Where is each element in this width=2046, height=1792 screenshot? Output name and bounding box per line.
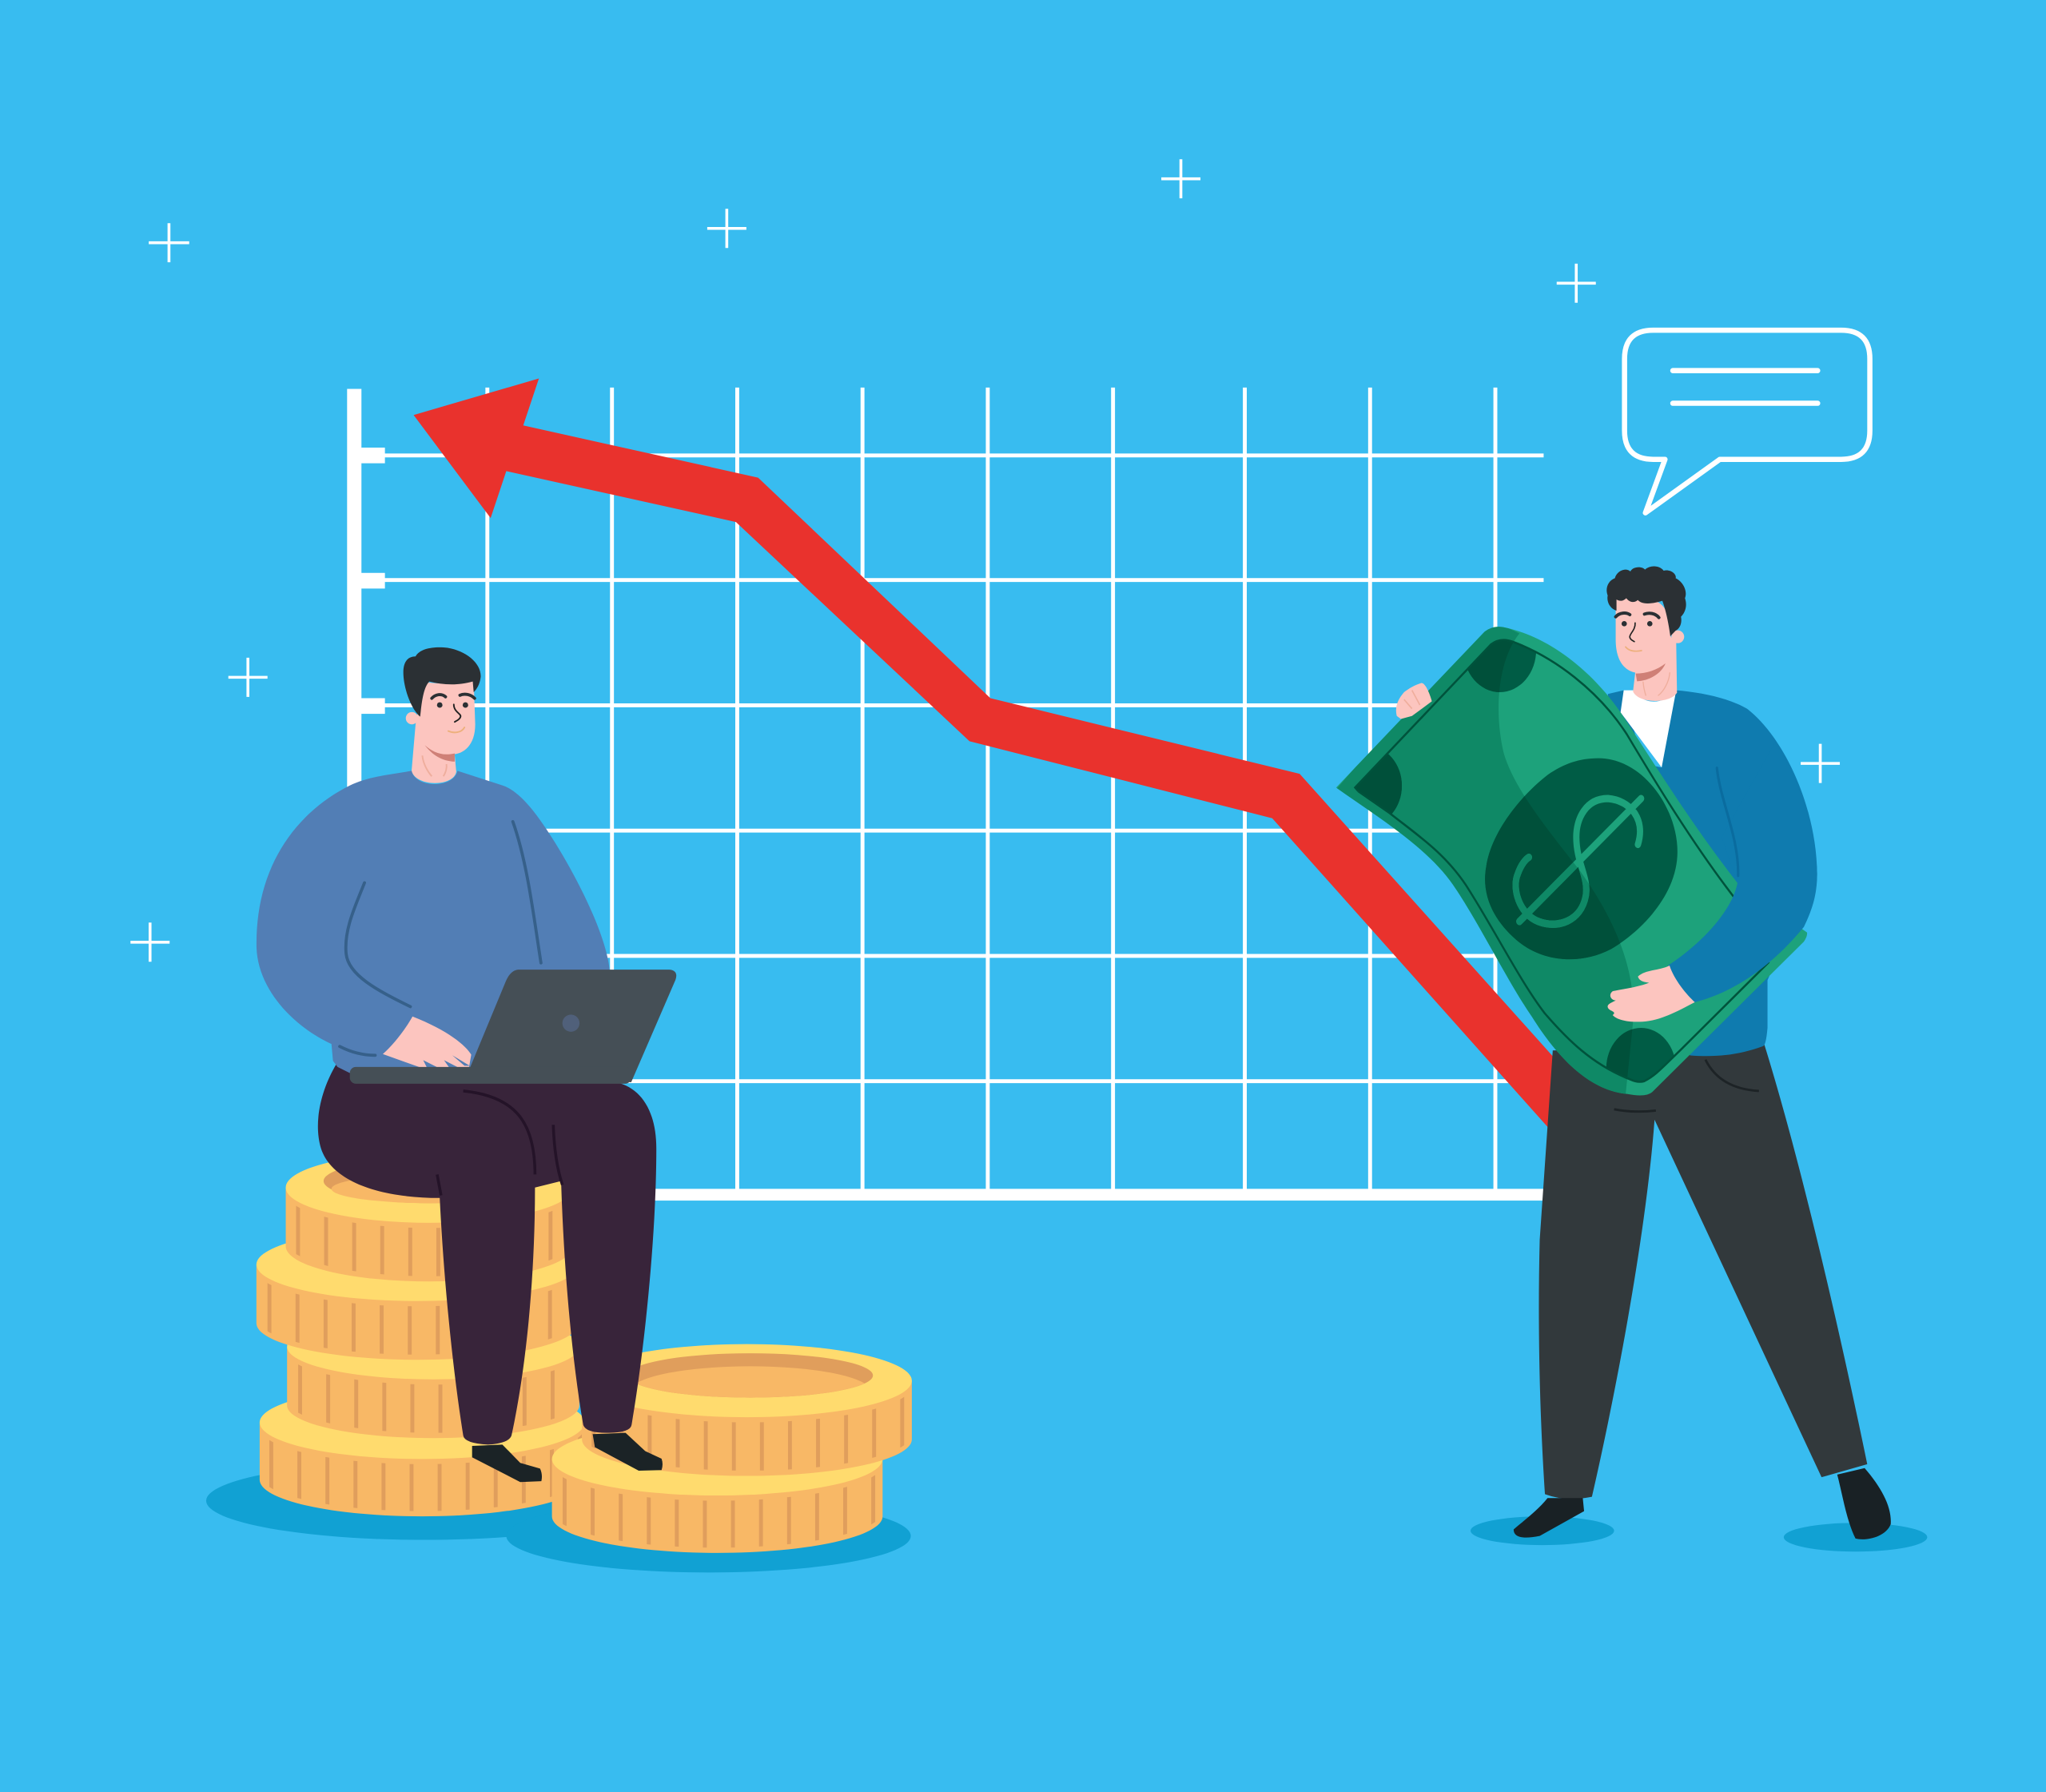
shaded dollar sign	[1512, 854, 1590, 928]
upper hand	[1396, 683, 1432, 719]
jacket body	[1608, 691, 1817, 1056]
jacket fold line	[1717, 768, 1738, 876]
head	[1606, 567, 1686, 701]
facial features	[1616, 613, 1659, 651]
sweater	[257, 771, 610, 1073]
curly hair	[1606, 567, 1686, 636]
hand	[383, 1017, 472, 1069]
inner border line	[1355, 640, 1769, 1081]
finger gaps	[424, 1055, 470, 1068]
corner medallions	[1388, 643, 1674, 1081]
coin: second of left stack	[287, 1314, 579, 1438]
coin: top of left stack	[286, 1153, 573, 1281]
sparkle plus signs	[130, 159, 1840, 962]
shoes	[1514, 1468, 1891, 1539]
face	[416, 680, 476, 755]
trouser crease lines	[437, 1091, 563, 1196]
red falling arrow	[414, 378, 1559, 1133]
shoes	[472, 1433, 663, 1482]
coin: top of right stack	[582, 1344, 912, 1476]
lower hand	[1608, 966, 1695, 1021]
dollar sign	[1515, 798, 1641, 924]
banknote and arms	[1327, 607, 1817, 1109]
facial features	[432, 695, 475, 732]
hair	[404, 647, 481, 717]
man holding banknote	[1327, 567, 1891, 1539]
ear	[1671, 631, 1684, 643]
neck shadow	[1636, 663, 1666, 681]
ear	[406, 712, 418, 724]
left coin stack	[257, 1153, 584, 1516]
upper body	[257, 647, 676, 1084]
finger lines	[1404, 691, 1420, 709]
banknote shaded half	[1327, 617, 1634, 1097]
centre medallion	[1485, 759, 1678, 959]
banknote	[1327, 607, 1807, 1109]
speech bubble	[1625, 330, 1870, 513]
coin: bottom of left stack	[260, 1386, 584, 1516]
neck lines	[422, 755, 447, 776]
trousers	[318, 1064, 656, 1444]
face	[1616, 598, 1672, 673]
front jacket arm	[1668, 742, 1817, 1002]
trousers	[1538, 1044, 1867, 1499]
coin: third of left stack	[257, 1228, 579, 1360]
white shirt	[1621, 691, 1676, 767]
laptop	[350, 970, 676, 1084]
trouser lines	[1614, 1060, 1759, 1112]
man with laptop	[257, 647, 676, 1482]
banknote paper	[1336, 627, 1807, 1096]
illustration: falling market scene	[130, 159, 1928, 1573]
neck shadow	[424, 745, 455, 762]
ground shadows	[206, 1462, 1927, 1572]
shaded medallion parts	[1357, 641, 1632, 1077]
neck crease lines	[1643, 673, 1670, 695]
neck	[412, 724, 456, 783]
right coin stack	[552, 1344, 912, 1553]
coin: lower of right stack	[552, 1423, 882, 1553]
sweater fold lines	[340, 822, 541, 1055]
neck	[1633, 631, 1677, 701]
chart grid and axes	[347, 388, 1543, 1201]
